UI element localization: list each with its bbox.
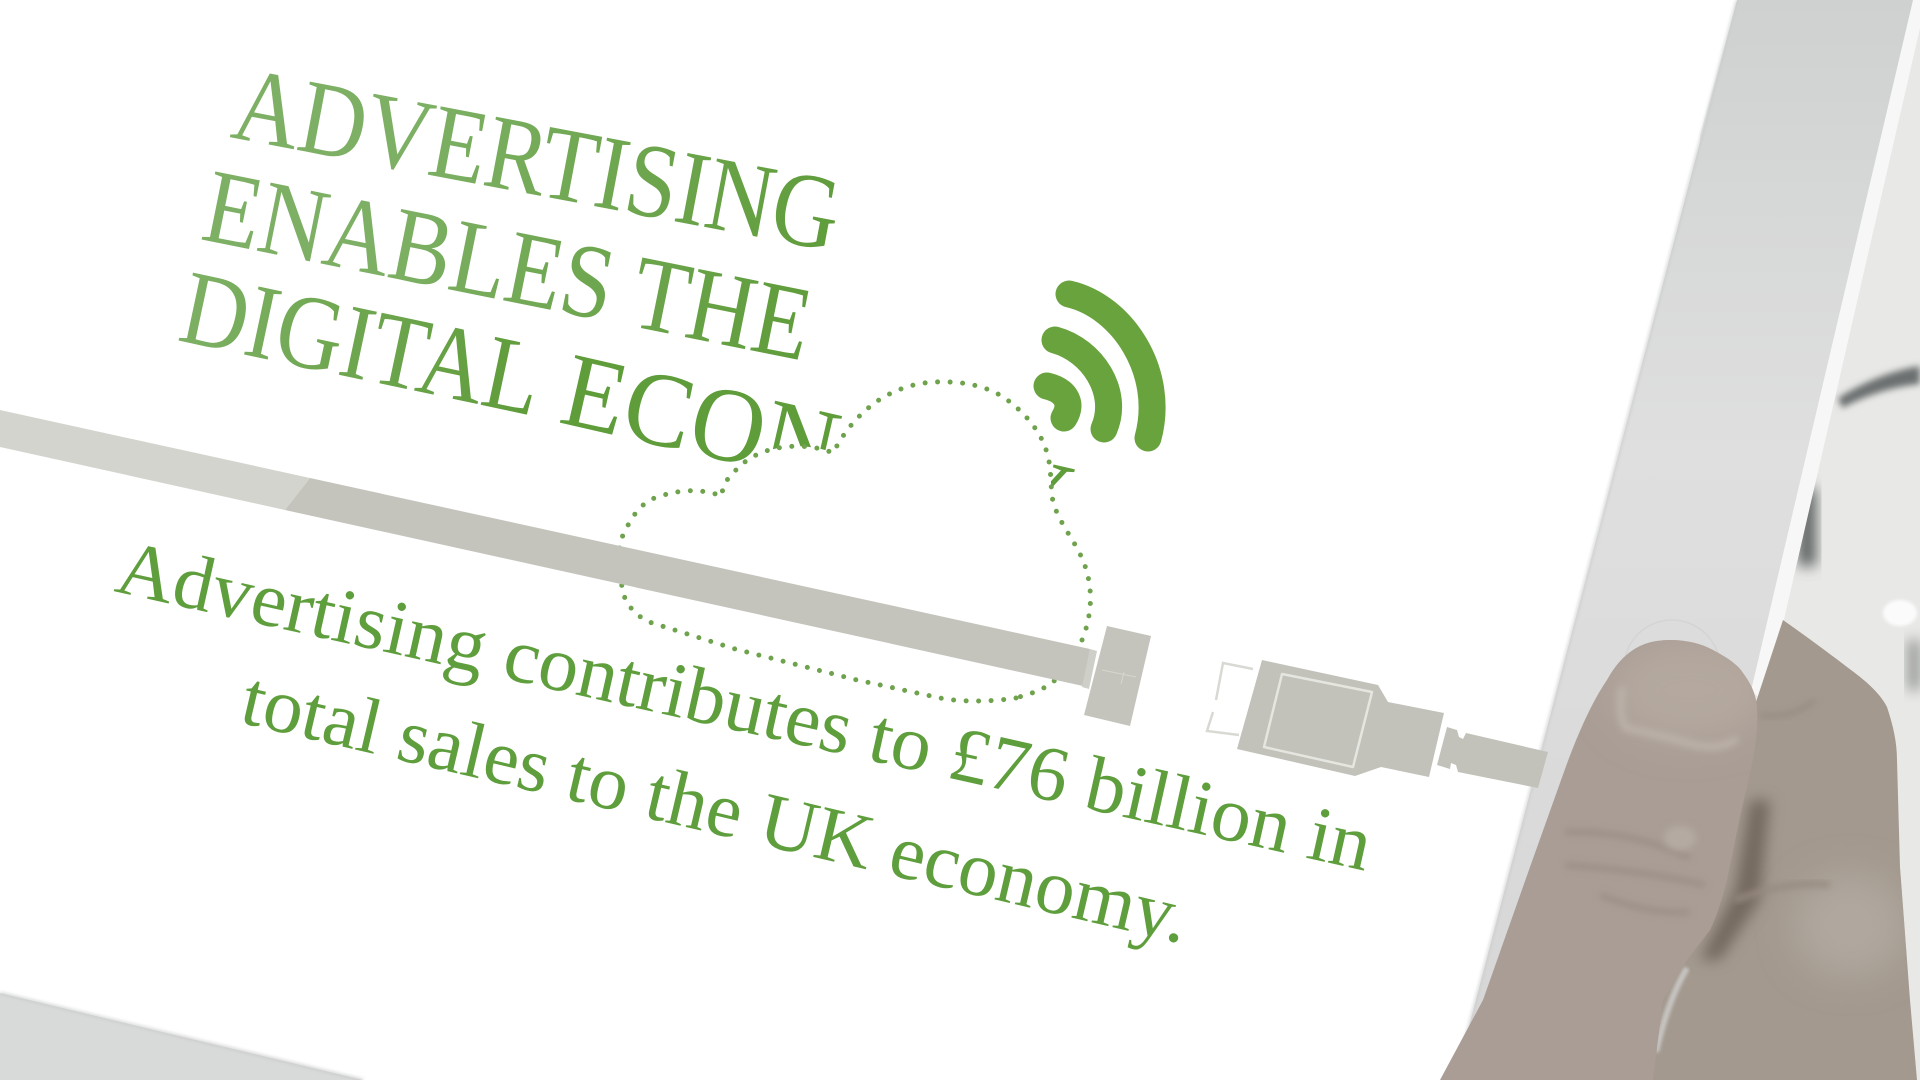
heading bbox=[171, 45, 1083, 560]
thumbnail rim bbox=[1621, 690, 1735, 747]
tablet bezel: right edge bbox=[1455, 0, 1920, 1080]
icon: small USB connector bbox=[1082, 626, 1151, 726]
cable: dark section bbox=[285, 478, 1090, 686]
icon: dotted cloud bbox=[619, 382, 1090, 701]
wifi outer arc bbox=[1069, 294, 1152, 438]
blurred photo background bbox=[1700, 0, 1920, 1080]
wifi middle arc bbox=[1055, 340, 1109, 429]
heading line 1: ADVERTISING bbox=[225, 45, 850, 274]
body text line 2: total sales to the UK economy. bbox=[234, 654, 1198, 960]
body text line 1: Advertising contributes to £76 billion in bbox=[109, 523, 1380, 887]
tablet bezel: bottom edge bbox=[0, 993, 363, 1080]
wifi inner arc bbox=[1047, 386, 1068, 418]
cable: light section bbox=[0, 410, 310, 510]
heading line 3, second word: ECONOMY bbox=[552, 330, 1083, 560]
fingers behind tablet bbox=[1640, 600, 1920, 1080]
knuckle creases bbox=[1565, 832, 1705, 912]
thumb bbox=[1440, 640, 1757, 1080]
body text bbox=[109, 523, 1380, 960]
icon: large USB plug bbox=[1207, 660, 1548, 788]
heading line 3, first word: DIGITAL bbox=[171, 248, 553, 438]
heading line 2: ENABLES THE bbox=[194, 147, 821, 383]
icon: wifi signal bbox=[1047, 294, 1152, 438]
